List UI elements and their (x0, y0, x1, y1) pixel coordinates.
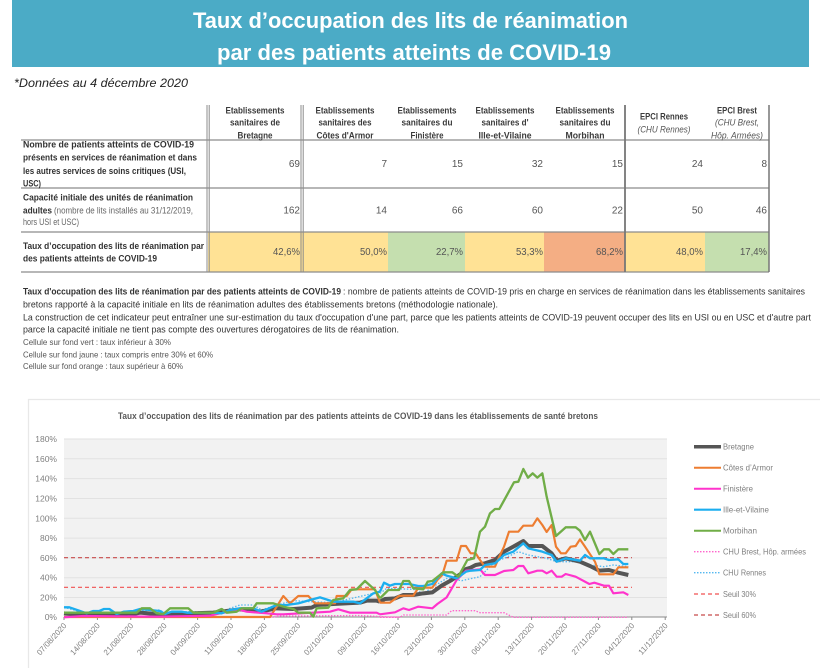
legend: CHU Brest: CHU Brest, Hôp. armées (723, 547, 806, 557)
explanatory text: parce la capacité initiale ne tient pas compte des ouvertures dérogatoires de lits de réanimation. (23, 325, 399, 335)
legend: Seuil 60% (694, 610, 756, 620)
explanatory text: Taux d'occupation des lits de réanimation par des patients atteints de COVID-19 (23, 287, 341, 297)
title banner (12, 0, 809, 67)
legend: CHU Rennes: CHU Rennes (723, 568, 766, 578)
row label: capacity: (nombre de lits installés au 31/12/2019, (54, 205, 193, 215)
values: capacity: 162 (283, 206, 300, 216)
values: occupancy rate: 53,3% (516, 247, 543, 258)
explanatory text: Cellule sur fond jaune : taux compris entre 30% et 60% (23, 349, 213, 359)
series: Finistère (64, 566, 628, 617)
legend: CHU Rennes (694, 568, 766, 578)
column headers: (CHU Rennes) (638, 124, 691, 134)
y axis labels: 160% (35, 454, 57, 464)
legend (694, 442, 806, 620)
column headers: sanitaires du (560, 118, 610, 128)
chart title: Taux d’occupation des lits de réanimation par des patients atteints de COVID-19 dans les établissements de santé bretons (118, 411, 598, 421)
x axis date labels: 14/08/2020 (68, 621, 102, 657)
y axis labels: 0% (45, 612, 57, 622)
y axis labels: 60% (40, 553, 57, 563)
x axis date labels (35, 621, 670, 657)
x axis date labels: 28/08/2020 (135, 621, 169, 657)
x axis date labels: 27/11/2020 (570, 621, 603, 657)
x axis date labels: 09/10/2020 (336, 621, 369, 657)
x axis date labels: 13/11/2020 (503, 621, 536, 657)
x axis date labels: 11/09/2020 (202, 621, 236, 657)
x axis date labels: 11/12/2020 (637, 621, 670, 657)
values: patients: 8 (761, 159, 767, 170)
legend: Seuil 60%: Seuil 60% (723, 610, 756, 620)
column headers: Ille-et-Vilaine (478, 130, 532, 140)
series: Morbihan (64, 469, 628, 617)
series: Côtes d'Armor (64, 518, 628, 617)
y axis labels: 180% (35, 434, 57, 444)
threshold lines (64, 558, 632, 587)
series: CHU Brest, Hôp. armées (64, 611, 628, 617)
column headers: sanitaires d' (482, 118, 528, 128)
row label: occupancy rate (23, 241, 204, 263)
y axis labels: 120% (35, 494, 57, 504)
x axis date labels: 18/09/2020 (235, 621, 269, 657)
row label: patients (23, 140, 197, 189)
x axis date labels: 04/09/2020 (169, 621, 202, 657)
column headers: Etablissements (476, 106, 534, 116)
legend: Seuil 30%: Seuil 30% (723, 589, 756, 599)
legend: Bretagne: Bretagne (723, 442, 754, 452)
x axis date labels: 02/10/2020 (302, 621, 336, 657)
explanatory text: bretons rapporté à la capacité initiale en lits de réanimation adultes des établissements bretons (méthodologie nationale). (23, 300, 498, 310)
title banner: Taux d’occupation des lits de réanimation (193, 8, 628, 33)
values: occupancy rate: 22,7% (436, 247, 463, 258)
legend: Bretagne (694, 442, 754, 452)
x axis date labels: 23/10/2020 (402, 621, 436, 657)
column headers: Côtes d'Armor (316, 130, 374, 140)
legend: Seuil 30% (694, 589, 756, 599)
row label: capacity: hors USI et USC) (23, 217, 79, 227)
legend: CHU Brest (694, 547, 806, 557)
row label: capacity: Capacité initiale des unités de réanimation (23, 193, 193, 203)
y axis labels: 20% (40, 592, 57, 602)
y axis labels: 100% (35, 513, 57, 523)
explanatory text: La construction de cet indicateur peut entraîner une sur-estimation du taux d'occupation d'une part, parce que les patients atteints de COVID-19 peuvent occuper des lits en USI ou en USC et d'autre part (23, 312, 811, 322)
series: Ille-et-Vilaine (64, 543, 628, 614)
values: capacity (283, 206, 767, 216)
column headers: sanitaires de (230, 118, 280, 128)
values: capacity: 46 (756, 206, 767, 216)
explanatory text (23, 287, 811, 371)
x axis date labels: 30/10/2020 (436, 621, 470, 657)
y axis labels: 140% (35, 474, 57, 484)
legend: Finistère (694, 484, 753, 494)
table grid lines (21, 105, 769, 272)
x axis date labels: 06/11/2020 (470, 621, 503, 657)
x axis date labels: 21/08/2020 (102, 621, 136, 657)
x axis date labels: 25/09/2020 (269, 621, 303, 657)
x axis date labels: 20/11/2020 (536, 621, 570, 657)
legend: Finistère: Finistère (723, 484, 753, 494)
legend: Côtes d'Armor: Côtes d’Armor (723, 463, 773, 473)
row label: capacity: adultes (23, 205, 52, 215)
chart frame (28, 400, 820, 668)
values: occupancy rate: 17,4% (740, 247, 767, 258)
coloured occupancy cells (208, 232, 769, 272)
column headers: Etablissements (398, 106, 456, 116)
values: patients: 15 (452, 159, 463, 170)
values: occupancy rate: 68,2% (596, 247, 623, 258)
x axis date labels: 16/10/2020 (369, 621, 403, 657)
explanatory text: Cellule sur fond orange : taux supérieur à 60% (23, 361, 183, 371)
column headers (226, 106, 763, 140)
values: patients: 15 (612, 159, 623, 170)
data date note: *Données au 4 décembre 2020 (14, 76, 188, 90)
values: occupancy rate: 48,0% (676, 247, 703, 258)
column headers: Etablissements (316, 106, 374, 116)
row label: patients: présents en services de réanimation et dans (23, 153, 197, 163)
values: patients: 32 (532, 159, 543, 170)
values: patients: 7 (381, 159, 387, 170)
values: occupancy rate: 50,0% (360, 247, 387, 258)
values: patients: 69 (289, 159, 300, 170)
row label: capacity (23, 193, 193, 227)
series: Bretagne (64, 541, 628, 615)
column headers: Finistère (410, 130, 444, 140)
values: occupancy rate: 42,6% (273, 247, 300, 258)
values: capacity: 22 (612, 206, 623, 216)
x axis date labels: 07/08/2020 (35, 621, 69, 657)
series: CHU Rennes (64, 552, 628, 613)
legend: Ille-et-Vilaine (694, 505, 769, 515)
values: patients (289, 159, 767, 170)
y axis labels: 80% (40, 533, 57, 543)
row label: patients: USC) (23, 179, 41, 189)
values: capacity: 66 (452, 206, 463, 216)
legend: Côtes d'Armor (694, 463, 773, 473)
explanatory text: Cellule sur fond vert : taux inférieur à 30% (23, 337, 171, 347)
values: capacity: 14 (376, 206, 387, 216)
x axis date labels: 04/12/2020 (603, 621, 637, 657)
column headers: sanitaires des (318, 118, 372, 128)
column headers: EPCI Brest (717, 106, 757, 116)
column headers: Bretagne (238, 130, 272, 140)
plot area (64, 439, 667, 620)
chart panel (28, 400, 820, 668)
row label: occupancy rate: Taux d’occupation des lits de réanimation par (23, 241, 204, 251)
column headers: EPCI Rennes (640, 111, 688, 121)
row label: patients: Nombre de patients atteints de COVID-19 (23, 140, 194, 150)
title banner: par des patients atteints de COVID-19 (217, 40, 611, 65)
column headers: Hôp. Armées) (711, 130, 763, 140)
values: capacity: 60 (532, 206, 543, 216)
occupancy table (21, 105, 769, 272)
y axis labels (35, 434, 57, 622)
values: occupancy rate (273, 247, 767, 258)
values: capacity: 50 (692, 206, 703, 216)
row label: patients: les autres services de soins critiques (USI, (23, 166, 186, 176)
values: patients: 24 (692, 159, 703, 170)
column headers: Morbihan (566, 130, 604, 140)
column headers: Etablissements (226, 106, 284, 116)
column headers: sanitaires du (402, 118, 452, 128)
legend: Morbihan (694, 526, 757, 536)
legend: Ille-et-Vilaine: Ille-et-Vilaine (723, 505, 769, 515)
y axis labels: 40% (40, 573, 57, 583)
column headers: (CHU Brest, (715, 118, 759, 128)
column headers: Etablissements (556, 106, 614, 116)
explanatory text: : nombre de patients atteints de COVID-19 pris en charge en services de réanimation dans les établissements sanitaires (343, 287, 805, 297)
row label: occupancy rate: des patients atteints de COVID-19 (23, 253, 157, 263)
legend: Morbihan: Morbihan (723, 526, 757, 536)
